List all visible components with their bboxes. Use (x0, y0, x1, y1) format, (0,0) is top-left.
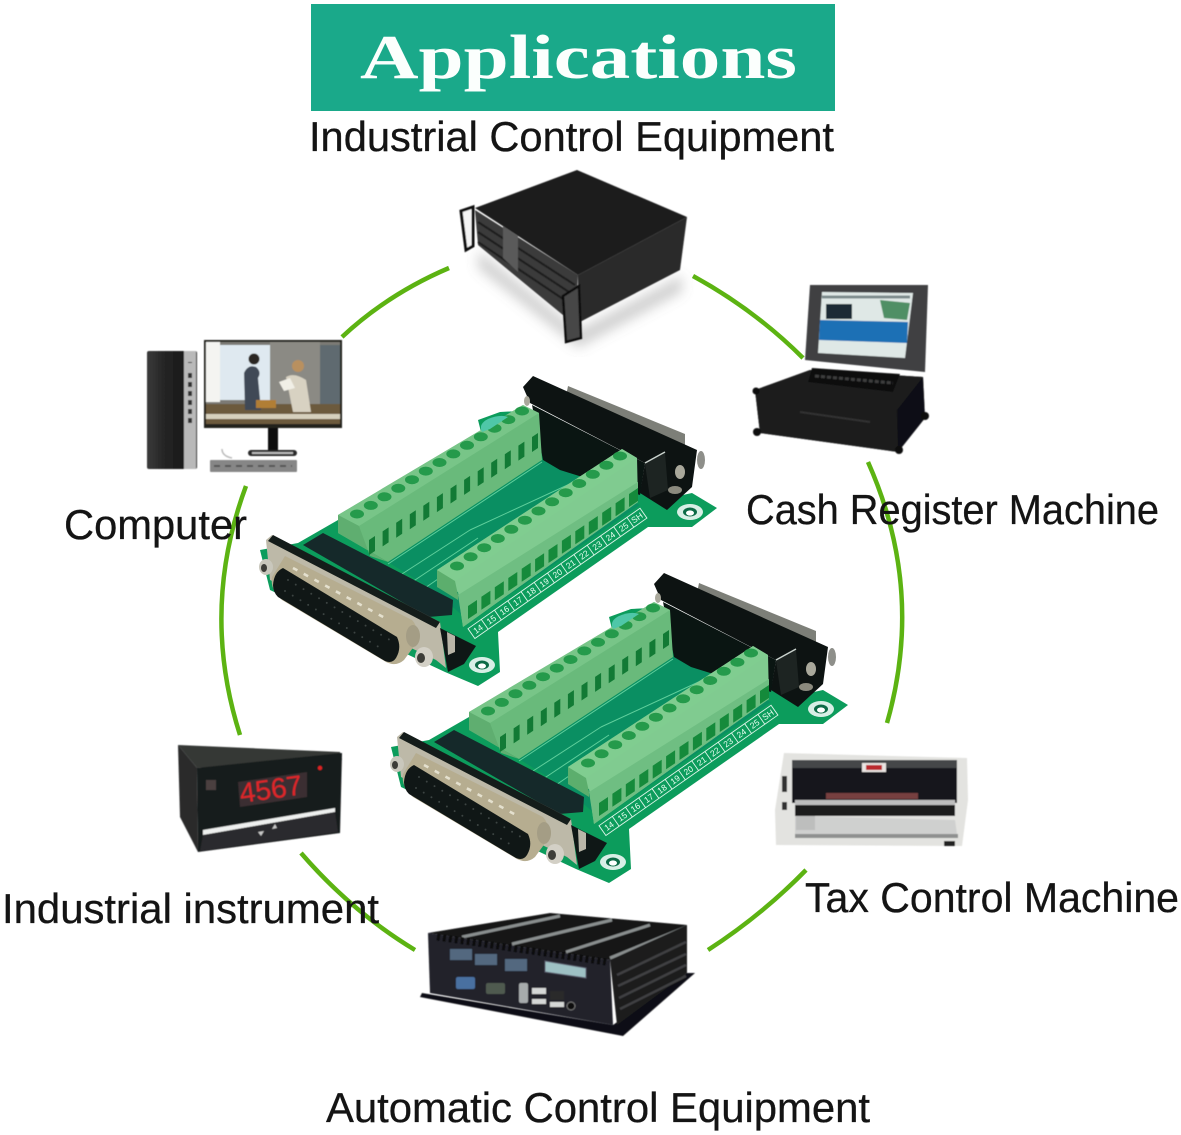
terminal numbers: 15 (616, 810, 629, 824)
label: cash register machine: Cash Register Machine (746, 486, 1159, 533)
label: industrial instrument: Industrial instrument (2, 885, 379, 932)
title banner (311, 4, 835, 111)
terminal numbers: 16 (498, 604, 511, 617)
terminal numbers: 18 (524, 585, 538, 599)
terminal numbers: 17 (511, 594, 525, 608)
label: computer: Computer (64, 501, 247, 548)
icon: rugged laptop (752, 285, 929, 454)
icon: industrial instrument (178, 745, 342, 852)
terminal numbers: 20 (551, 566, 564, 580)
label: tax control machine: Tax Control Machine (805, 874, 1179, 921)
stand and keyboard (268, 428, 278, 451)
terminal numbers: 21 (564, 557, 578, 571)
terminal numbers: 23 (721, 736, 735, 749)
icon: desktop computer (147, 340, 342, 472)
label: automatic control equipment: Automatic Control Equipment (326, 1084, 870, 1131)
terminal numbers: 23 (590, 539, 604, 552)
terminal numbers: 24 (604, 529, 617, 543)
product: terminal board lower (390, 573, 848, 883)
terminal numbers: 14 (471, 622, 485, 636)
icon: rack server (461, 170, 687, 348)
terminal numbers: SH (760, 707, 776, 722)
terminal numbers: 14 (602, 819, 616, 833)
terminal numbers: 19 (668, 773, 682, 786)
terminal numbers: 17 (642, 791, 656, 805)
tower (147, 351, 197, 469)
terminal numbers: SH (629, 510, 645, 525)
terminal numbers: 19 (537, 576, 551, 589)
terminal numbers: 20 (682, 763, 695, 777)
terminal numbers: 25 (748, 717, 762, 731)
terminal numbers (471, 510, 645, 636)
product: terminal board upper (259, 376, 717, 686)
terminal numbers: 22 (577, 548, 591, 562)
icon: fanless industrial computer (420, 913, 695, 1036)
title banner: Applications (360, 24, 797, 92)
icon: industrial instrument: 4567 (238, 769, 304, 809)
terminal numbers (602, 707, 776, 833)
monitor (204, 340, 342, 428)
terminal numbers: 22 (708, 745, 722, 759)
terminal numbers: 25 (617, 520, 631, 534)
terminal numbers: 24 (735, 726, 748, 740)
connecting arcs (221, 268, 902, 950)
terminal numbers: 21 (695, 754, 709, 768)
terminal numbers: 16 (629, 801, 642, 814)
terminal numbers: 15 (485, 613, 498, 627)
terminal numbers: 18 (655, 782, 669, 796)
icon: dot matrix printer (775, 753, 968, 846)
label: industrial control equipment: Industrial Control Equipment (309, 113, 834, 160)
